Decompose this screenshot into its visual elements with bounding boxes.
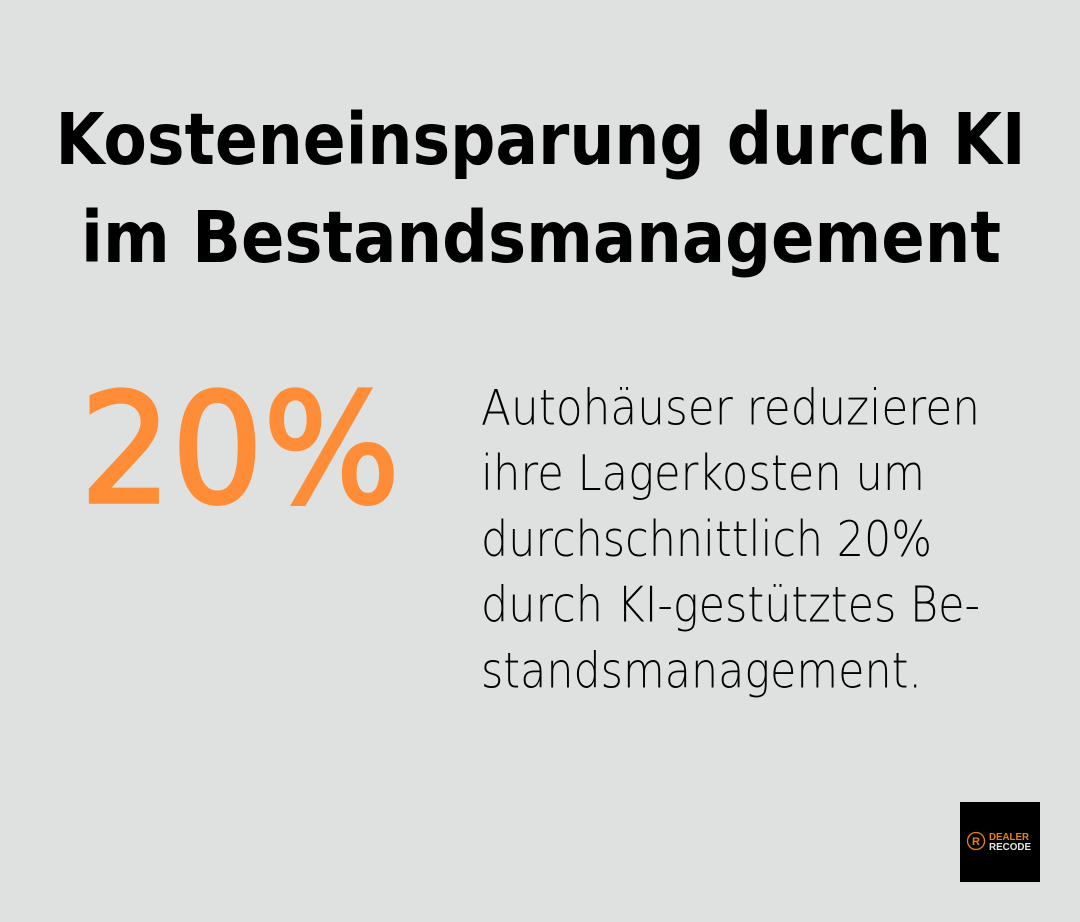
description text block: standsmanagement. (481, 642, 922, 700)
description text block: durchschnittlich 20% (481, 511, 932, 568)
description text block: ihre Lagerkosten um (481, 445, 925, 502)
logo wordmark (989, 832, 1031, 853)
description text block: durch KI-gestütztes Be- (481, 576, 980, 634)
title: im Bestandsmanagement (81, 196, 1001, 279)
icon: R in a circle: R (972, 836, 980, 848)
description text block (481, 380, 980, 700)
description text block: Autohäuser reduzieren (481, 380, 980, 436)
logo wordmark: DEALER (989, 832, 1030, 843)
logo wordmark: RECODE (989, 842, 1031, 853)
logo: Dealer Recode (960, 802, 1040, 882)
title (56, 98, 1026, 279)
big statistic: 20%: 20% (80, 361, 400, 538)
